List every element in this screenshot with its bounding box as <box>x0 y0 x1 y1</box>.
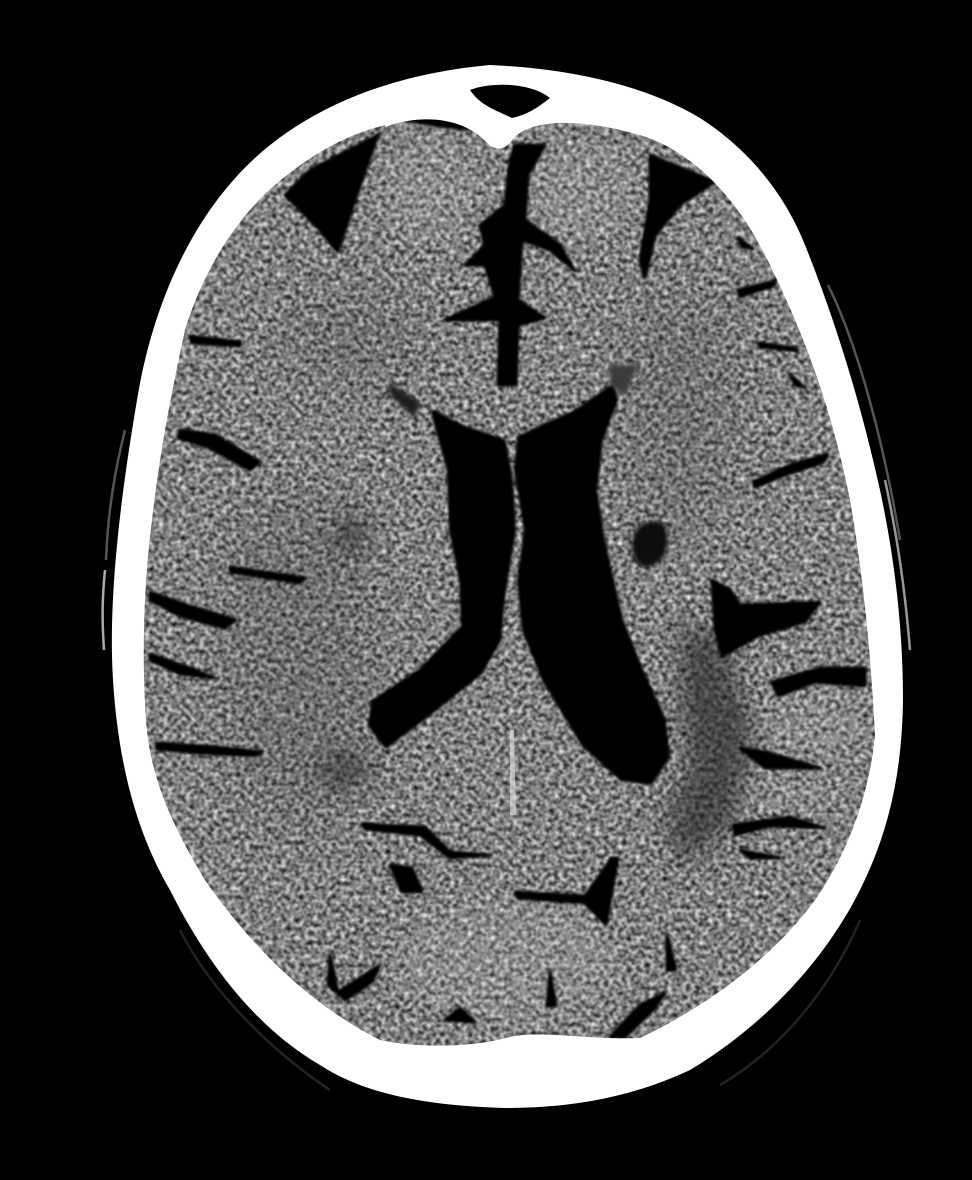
brain base with grain <box>144 119 875 1046</box>
skull <box>112 65 903 1108</box>
frontal sinus <box>470 85 550 118</box>
frontal sulci and cortical fissures <box>150 117 865 1037</box>
axial head CT scan <box>101 65 912 1108</box>
brain parenchyma <box>144 119 875 1046</box>
ventricles <box>371 388 667 782</box>
posterior infarct region <box>319 513 755 865</box>
periventricular low density <box>225 300 730 830</box>
scalp traces <box>103 285 910 1090</box>
dark rim around the caudate <box>388 382 420 418</box>
left-image lateral ventricle <box>371 413 513 745</box>
small lacunar infarct <box>632 521 668 568</box>
falx calcification <box>510 730 516 815</box>
brighter cortical gyri <box>380 140 865 1020</box>
right-image lateral ventricle <box>517 388 667 782</box>
